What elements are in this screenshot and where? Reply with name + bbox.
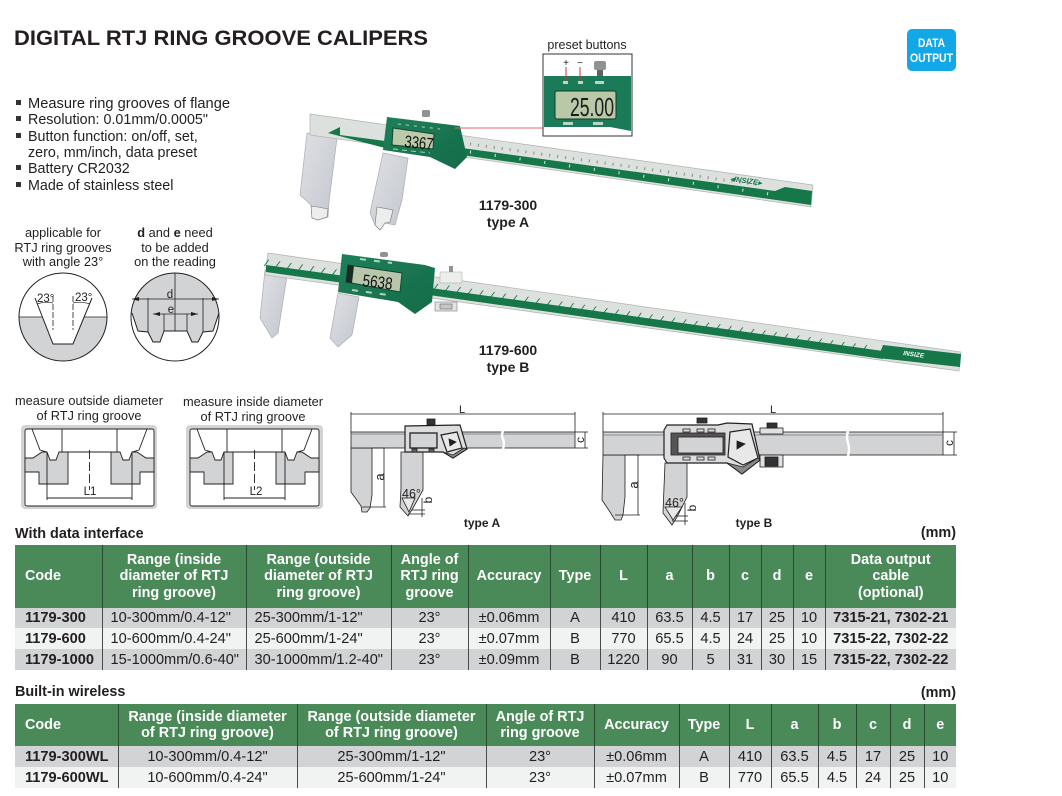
table: built-in wireless: c [869, 717, 877, 733]
table: with data interface: 7315-21, 7302-21 [833, 610, 948, 626]
table: with data interface: diameter of RTJ [120, 568, 228, 584]
diagram: inside diameter L2 [186, 425, 323, 509]
table: with data interface: Code [25, 568, 61, 584]
table: built-in wireless: 25-300mm/1-12" [337, 748, 446, 764]
table: built-in wireless: Accuracy [604, 717, 669, 733]
feature list: Resolution: 0.01mm/0.0005" [28, 112, 208, 128]
table: with data interface: 30 [769, 652, 785, 668]
preset buttons label: preset buttons [547, 38, 627, 52]
technical drawing: type B: L [770, 404, 776, 416]
table: with data interface: 410 [611, 610, 636, 626]
inset: preset buttons: 25.00 [570, 92, 614, 122]
technical drawing: type B: a [626, 481, 641, 489]
table: with data interface: 24 [737, 630, 753, 646]
table: built-in wireless: 25 [899, 770, 915, 786]
table: built-in wireless: 1179-600WL [25, 770, 109, 786]
table: built-in wireless: 23° [529, 770, 551, 786]
table: with data interface: 1179-1000 [25, 652, 94, 668]
table: with data interface: 15 [801, 652, 817, 668]
unit: mm: (mm) [921, 525, 956, 541]
badge: data output: DATA [918, 36, 945, 50]
table: with data interface: 25 [769, 630, 785, 646]
table: with data interface: Type [559, 568, 591, 584]
inset: preset buttons [543, 54, 632, 136]
caption: angle 23: applicable for [25, 225, 102, 240]
caption: d and e [134, 225, 216, 269]
model label: 1179-600 type B [479, 342, 537, 375]
table: built-in wireless: 17 [865, 748, 881, 764]
feature list: Measure ring grooves of flange [28, 96, 230, 112]
table: with data interface: a [665, 568, 674, 584]
table: with data interface: e [805, 568, 813, 584]
table: with data interface: 25-300mm/1-12" [254, 610, 363, 626]
technical drawing: type A: L [459, 404, 465, 416]
inset: preset buttons: − [577, 58, 583, 69]
feature list [16, 96, 230, 194]
table: built-in wireless: ring groove [500, 725, 580, 741]
caliper photo: type B 1179-600 [260, 252, 961, 371]
table: with data interface: 10 [801, 630, 817, 646]
diagram: 23 degree groove circle [18, 272, 108, 362]
table: with data interface: cable [872, 568, 909, 584]
table: with data interface: 25-600mm/1-24" [254, 630, 363, 646]
table: with data interface: 23° [418, 652, 441, 668]
table: with data interface: 63.5 [655, 610, 684, 626]
table: with data interface: 90 [661, 652, 678, 668]
table: built-in wireless: 10 [932, 748, 948, 764]
caption: d and e: to be added [141, 240, 209, 255]
heading: with data interface: With data interface [15, 526, 144, 542]
table: with data interface: 10-300mm/0.4-12" [110, 610, 231, 626]
feature list: Button function: on/off, set, [28, 129, 198, 145]
caliper photo: type A 1179-300: ◂INSIZE▸ [730, 174, 764, 188]
callout line: head to inset [455, 127, 543, 129]
table: built-in wireless: 10 [932, 770, 948, 786]
diagram: 23 degree groove circle: 23° [75, 292, 92, 304]
heading: built-in wireless: Built-in wireless [15, 684, 125, 700]
table: with data interface: ±0.09mm [479, 652, 539, 668]
table: with data interface: 23° [418, 610, 441, 626]
table: built-in wireless: 63.5 [780, 748, 809, 764]
table: built-in wireless: of RTJ ring groove) [325, 725, 458, 741]
table: built-in wireless: Type [688, 717, 720, 733]
table: built-in wireless: B [699, 770, 709, 786]
diagram: d and e circle [130, 272, 220, 362]
caption: angle 23: RTJ ring grooves [14, 240, 112, 255]
table: built-in wireless: 4.5 [827, 770, 847, 786]
table: with data interface: 4.5 [700, 610, 721, 626]
caption: angle 23: with angle 23° [22, 254, 103, 269]
table: with data interface: ±0.06mm [479, 610, 539, 626]
diagram: 23 degree groove circle: 23° [37, 293, 54, 305]
table: built-in wireless: 10-300mm/0.4-12" [147, 748, 268, 764]
table: built-in wireless: e [936, 717, 944, 733]
table: with data interface: Range (inside [127, 552, 221, 568]
badge: data output [907, 29, 956, 71]
table: built-in wireless: 410 [738, 748, 762, 764]
table: built-in wireless: 10-600mm/0.4-24" [147, 770, 268, 786]
badge: data output: OUTPUT [910, 51, 954, 65]
table: with data interface: (optional) [858, 585, 924, 601]
table: with data interface: 7315-22, 7302-22 [833, 630, 948, 646]
table: with data interface: b [706, 568, 715, 584]
table: built-in wireless: 4.5 [827, 748, 847, 764]
table: with data interface: Data output [851, 552, 931, 568]
model label: 1179-300 type A: type A [487, 214, 529, 230]
table: built-in wireless: a [790, 717, 798, 733]
table: with data interface: c [741, 568, 749, 584]
table: built-in wireless: 25 [899, 748, 915, 764]
table: with data interface: 1220 [607, 652, 640, 668]
feature list: Made of stainless steel [28, 178, 173, 194]
feature list: Battery CR2032 [28, 161, 130, 177]
table: with data interface: 1179-300 [25, 610, 86, 626]
diagram: outside diameter L1: L1 [84, 486, 96, 498]
model label: 1179-300 type A: 1179-300 [479, 197, 537, 213]
table: built-in wireless: 65.5 [780, 770, 809, 786]
table: built-in wireless: Code [25, 717, 61, 733]
table: built-in wireless: Range (outside diameter [308, 708, 475, 724]
table: with data interface: 23° [418, 630, 441, 646]
table: built-in wireless: 770 [738, 770, 762, 786]
table: with data interface: 4.5 [700, 630, 721, 646]
technical drawing: type B [602, 404, 957, 525]
table: with data interface: 17 [737, 610, 753, 626]
caption: measure outside diameter: of RTJ ring groove [36, 408, 142, 423]
table: with data interface [15, 545, 956, 670]
caption: measure inside diameter: measure inside diameter [183, 394, 324, 409]
table: built-in wireless: ±0.06mm [606, 748, 667, 764]
table: with data interface: groove [406, 585, 453, 601]
unit: mm wireless: (mm) [921, 685, 956, 701]
technical drawing: type A: a [372, 473, 387, 481]
table: with data interface: 7315-22, 7302-22 [833, 652, 948, 668]
diagram: d and e circle: d [167, 289, 173, 301]
technical drawing: type B: b [685, 504, 699, 511]
table: with data interface: 25 [769, 610, 785, 626]
table: with data interface: Range (outside [267, 552, 370, 568]
technical drawing: type B: c [942, 440, 956, 446]
technical drawing: type A: b [421, 496, 435, 503]
table: built-in wireless: d [903, 717, 911, 733]
technical drawing: type A: 46° [402, 487, 421, 501]
technical drawing: type B: 46° [665, 496, 684, 510]
table: built-in wireless: 1179-300WL [25, 748, 109, 764]
table: built-in wireless [15, 704, 956, 788]
table: built-in wireless: 24 [865, 770, 881, 786]
table: with data interface: 65.5 [655, 630, 684, 646]
table: built-in wireless: Range (inside diameter [128, 708, 287, 724]
caption: angle 23 [14, 225, 112, 269]
table: built-in wireless: 25-600mm/1-24" [337, 770, 446, 786]
table: with data interface: diameter of RTJ [264, 568, 373, 584]
caption: measure outside diameter: measure outside diameter [15, 393, 164, 408]
table: with data interface: 30-1000mm/1.2-40" [254, 652, 383, 668]
table: with data interface: d [773, 568, 781, 584]
table: built-in wireless: A [699, 748, 709, 764]
table: with data interface: Accuracy [477, 568, 541, 584]
table: built-in wireless: ±0.07mm [606, 770, 667, 786]
table: with data interface: Angle of [401, 552, 458, 568]
table: with data interface: 15-1000mm/0.6-40" [110, 652, 239, 668]
inset: preset buttons: + [563, 58, 569, 69]
technical drawing: type A: c [573, 437, 587, 443]
diagram: d and e circle: e [168, 304, 174, 316]
table: built-in wireless: 23° [529, 748, 551, 764]
table: with data interface: A [570, 610, 580, 626]
model label: 1179-600 type B: type B [487, 359, 529, 375]
caliper photo: type B 1179-600: INSIZE [903, 350, 925, 360]
diagram: inside diameter L2: L2 [250, 486, 262, 498]
feature list: zero, mm/inch, data preset [28, 145, 197, 161]
title: DIGITAL RTJ RING GROOVE CALIPERS [14, 26, 428, 50]
table: built-in wireless: b [833, 717, 841, 733]
caption: measure inside diameter [183, 394, 324, 424]
table: with data interface: 10 [801, 610, 817, 626]
table: with data interface: ring groove) [132, 585, 216, 601]
table: with data interface: RTJ ring [400, 568, 459, 584]
caliper photo: type B 1179-600: 5638 [362, 271, 394, 294]
table: with data interface: ±0.07mm [479, 630, 539, 646]
table: built-in wireless: L [746, 717, 754, 733]
label: type B: type B [736, 516, 773, 530]
model label: 1179-300 type A [479, 197, 537, 230]
caliper photo: type A 1179-300: 3367 [404, 132, 434, 154]
model label: 1179-600 type B: 1179-600 [479, 342, 537, 358]
table: with data interface: 10-600mm/0.4-24" [110, 630, 231, 646]
caption: d and e: d and e need [137, 225, 213, 240]
technical drawing: type A [351, 404, 588, 517]
table: with data interface: 5 [706, 652, 715, 668]
table: with data interface: 1179-600 [25, 630, 86, 646]
label: type A: type A [464, 516, 500, 530]
table: with data interface: 31 [737, 652, 753, 668]
table: with data interface: B [570, 652, 580, 668]
table: built-in wireless: of RTJ ring groove) [141, 725, 274, 741]
caption: measure inside diameter: of RTJ ring groove [200, 409, 306, 424]
caption: measure outside diameter [15, 393, 164, 423]
caliper photo: type A 1179-300 [300, 110, 813, 230]
caption: d and e: on the reading [134, 254, 216, 269]
table: with data interface: 770 [611, 630, 636, 646]
table: built-in wireless: Angle of RTJ [496, 708, 584, 724]
table: with data interface: L [619, 568, 628, 584]
diagram: outside diameter L1 [21, 425, 157, 509]
table: with data interface: ring groove) [277, 585, 360, 601]
table: with data interface: B [570, 630, 580, 646]
